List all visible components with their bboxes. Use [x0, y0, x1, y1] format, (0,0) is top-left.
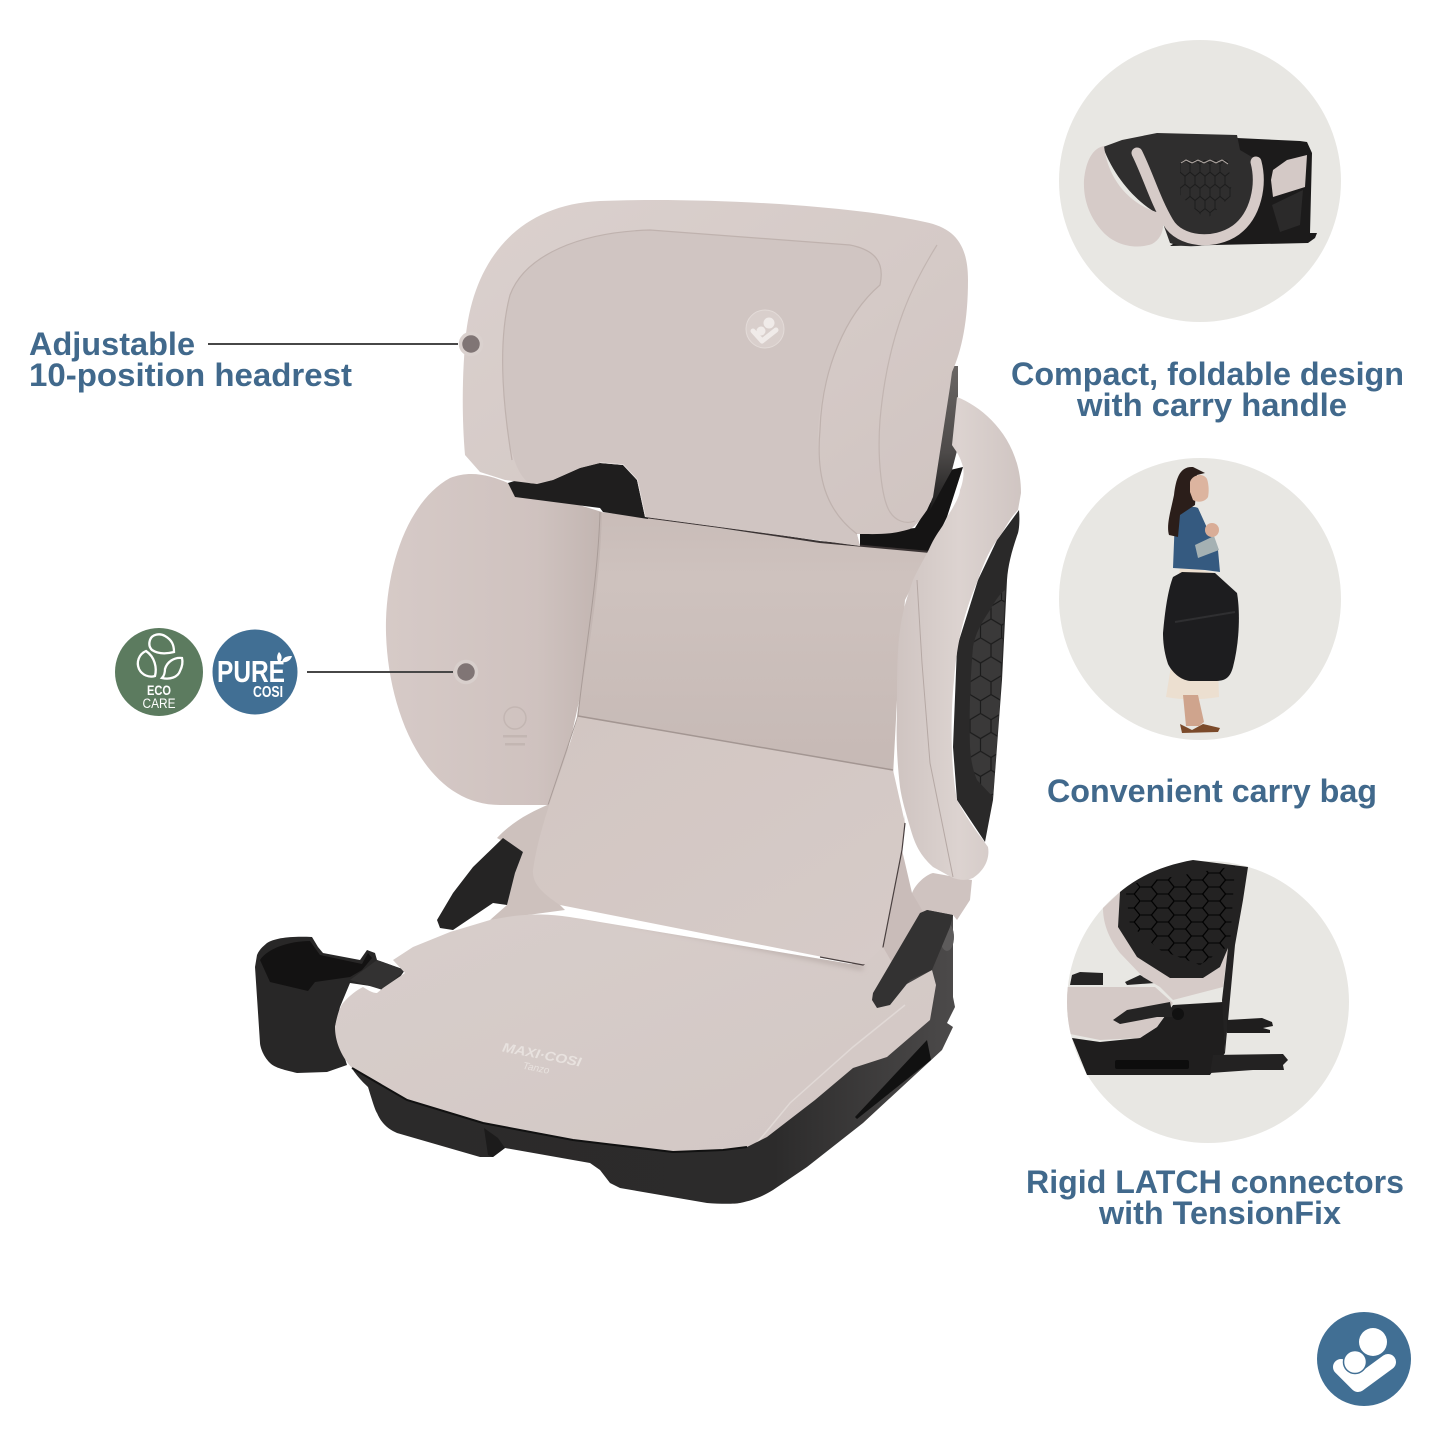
- panel: latch connectors: [1060, 860, 1349, 1143]
- label: compact foldable: with carry handle: [1076, 387, 1347, 423]
- centre back panel: [576, 512, 930, 776]
- face: [1190, 475, 1209, 502]
- right side lock button: [940, 923, 954, 951]
- black frame behind headrest: [860, 467, 963, 552]
- seat bottom edge: [352, 1068, 747, 1152]
- right side pad lower: [850, 815, 925, 990]
- right wing black shell: [953, 510, 1019, 842]
- skirt: [1166, 565, 1219, 699]
- right wing fabric: [897, 397, 1021, 880]
- marker dot: [460, 334, 482, 354]
- lever: [1113, 1002, 1173, 1024]
- rolled sleeve: [1195, 536, 1219, 558]
- shell: [1103, 133, 1259, 246]
- hex highlight: [1181, 160, 1228, 164]
- shell hex panel: [970, 590, 1005, 797]
- pink strip: [1137, 153, 1258, 240]
- back top seam: [645, 517, 930, 552]
- circle background: [1059, 40, 1341, 322]
- lumbar cushion: [533, 716, 905, 965]
- main product: booster car seat: [255, 190, 1021, 1204]
- circle background: [1059, 458, 1341, 740]
- wing seam: [917, 580, 953, 877]
- bag: [1163, 572, 1239, 681]
- callout: fabric badges: [115, 628, 476, 716]
- base slot: [855, 1040, 931, 1119]
- shell hex texture: [970, 590, 1005, 797]
- arm stub: [1125, 975, 1155, 985]
- eco tag on wing: [503, 707, 527, 746]
- badge: eco care: ECO: [147, 683, 171, 698]
- lower connector: [1210, 1054, 1288, 1073]
- seat cushion: [335, 914, 936, 1151]
- hex texture: [1180, 160, 1232, 220]
- seat brand text: [499, 1040, 583, 1082]
- pink back band: [1103, 892, 1228, 1000]
- label: compact foldable: [1011, 356, 1404, 423]
- legs: [1183, 695, 1204, 726]
- label: latch connectors: with TensionFix: [1098, 1195, 1341, 1231]
- label: carry bag: Convenient carry bag: [1047, 773, 1377, 809]
- callout label: Adjustable: [29, 326, 195, 362]
- black lower base: [1072, 1002, 1225, 1075]
- brand logo: [1317, 1312, 1411, 1406]
- hex texture: [1125, 866, 1235, 965]
- base slot: [1115, 1060, 1189, 1069]
- panel: compact foldable: [1059, 40, 1341, 322]
- callout label: 10-position headrest: [29, 357, 352, 393]
- clipped cup stub: [1070, 972, 1103, 985]
- headrest inner seam: [503, 230, 881, 534]
- pink seat: [1060, 987, 1173, 1040]
- jacket: [1173, 507, 1220, 572]
- hand: [1205, 523, 1219, 537]
- headrest bolster seam: [879, 245, 937, 522]
- folded fabric right: [1271, 155, 1307, 197]
- sandals: [1180, 724, 1220, 733]
- rear block: [1170, 138, 1317, 246]
- lumbar top seam: [578, 716, 893, 770]
- leader line: [208, 343, 458, 345]
- lumbar right outline: [820, 823, 905, 965]
- label: compact foldable: Compact, foldable design: [1011, 356, 1404, 392]
- seat brand text: MAXI·COSI: [501, 1040, 583, 1070]
- black base: [353, 900, 955, 1204]
- badge: pure cosi: COSI: [253, 684, 283, 701]
- base notch: [484, 1128, 505, 1157]
- lower right detail: [1272, 190, 1303, 232]
- grey support post: [930, 366, 958, 510]
- label: latch connectors: Rigid LATCH connectors: [1026, 1164, 1404, 1200]
- hair: [1168, 467, 1205, 537]
- bag fold: [1175, 612, 1235, 622]
- wing seam: [548, 512, 600, 805]
- seat brand text: Tanzo: [522, 1061, 551, 1077]
- leader line: [307, 671, 453, 673]
- cup holder: [255, 937, 405, 1073]
- brand mark on headrest: [746, 310, 784, 348]
- callout label: [29, 326, 352, 393]
- seat trim seam: [757, 1005, 905, 1143]
- left side pad: [490, 803, 565, 920]
- left wing: [386, 474, 602, 805]
- badge: pure cosi: [212, 630, 298, 714]
- panel: carry bag: [1059, 458, 1341, 740]
- label: latch connectors: [1026, 1164, 1404, 1231]
- badge: pure cosi: PURE: [217, 654, 285, 689]
- circle background: [1067, 861, 1349, 1143]
- seat rear shadow: [678, 935, 864, 971]
- lever knob: [1172, 1008, 1184, 1020]
- upper connector: [1227, 1018, 1273, 1033]
- head cushion: [1084, 146, 1163, 247]
- left belt guide: [437, 838, 523, 930]
- callout: adjustable headrest: [29, 326, 482, 393]
- right side pad upper: [912, 873, 972, 930]
- marker dot: [456, 662, 476, 682]
- badge: eco care: CARE: [142, 696, 176, 711]
- right belt guide: [872, 910, 953, 1008]
- badge: eco care: [115, 628, 203, 716]
- headrest: [462, 200, 968, 546]
- headrest notch edge: [600, 463, 645, 517]
- headrest inner pad: [502, 230, 881, 546]
- headrest support bar: [508, 452, 648, 519]
- back shell: [1118, 860, 1248, 1053]
